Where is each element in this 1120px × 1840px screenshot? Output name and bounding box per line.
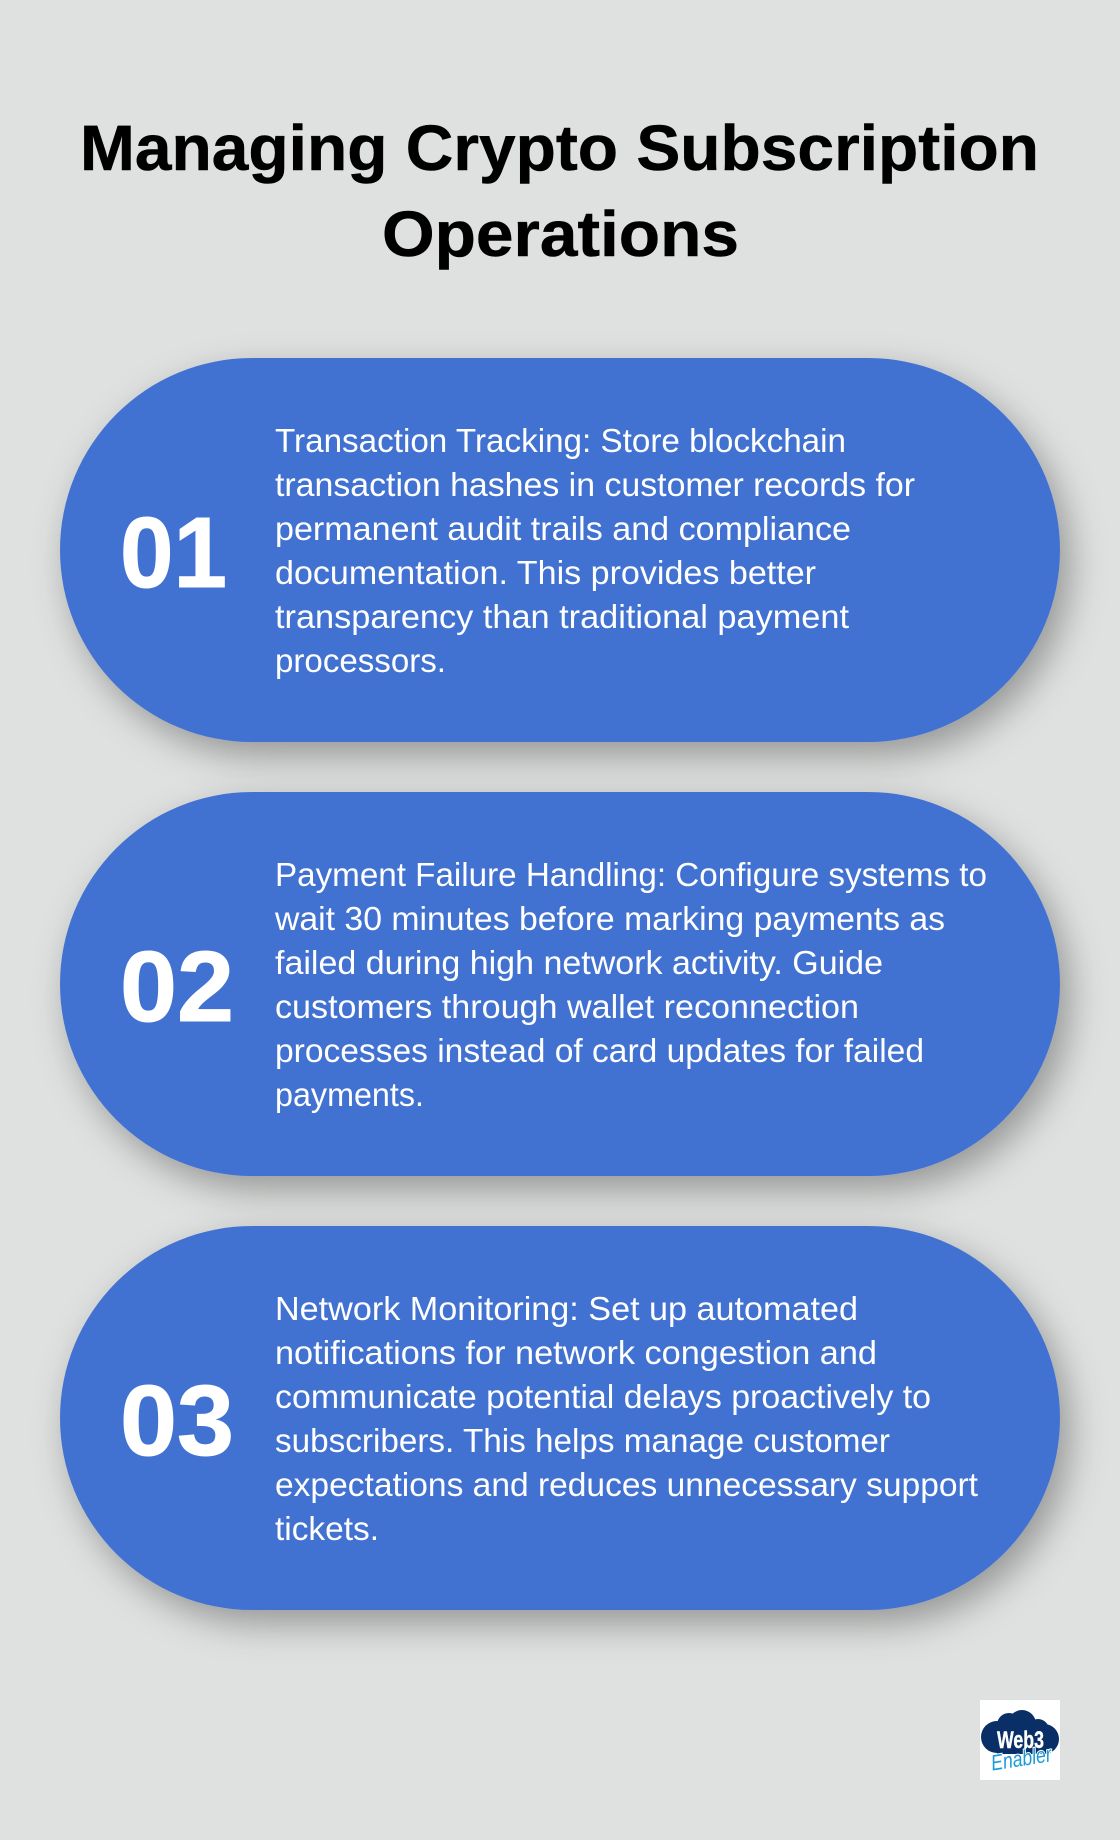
panel: step 02 payment failure handling: [60, 792, 1060, 1176]
text block 02: failed during high network activity. Guide: [275, 944, 883, 981]
pill background 02: [60, 792, 1060, 1176]
number 01: 01: [120, 497, 227, 609]
text block 01: Transaction Tracking: Store blockchain: [275, 422, 846, 459]
panel: step 03 network monitoring: [60, 1226, 1060, 1610]
text block 02: [274, 856, 987, 1113]
text block 02: payments.: [275, 1076, 424, 1113]
title: [80, 112, 1039, 270]
pill background 01: [60, 358, 1060, 742]
text block 03: [275, 1290, 978, 1547]
text block 03: tickets.: [275, 1510, 379, 1547]
text block 02: customers through wallet reconnection: [275, 988, 859, 1025]
text block 02: wait 30 minutes before marking payments as: [274, 900, 945, 937]
text block 01: [275, 422, 915, 679]
pill background 03: [60, 1226, 1060, 1610]
text block 03: communicate potential delays proactively to: [275, 1378, 931, 1415]
icon: Web3 Enabler logo: Enabler: [989, 1741, 1055, 1776]
text block 01: documentation. This provides better: [275, 554, 816, 591]
text block 03: subscribers. This helps manage customer: [275, 1422, 890, 1459]
title: Operations: [382, 198, 739, 270]
number 02: 02: [120, 931, 234, 1043]
number 03: 03: [120, 1365, 234, 1477]
text block 01: transparency than traditional payment: [275, 598, 849, 635]
panel: step 01 transaction tracking: [60, 358, 1060, 742]
text block 02: processes instead of card updates for failed: [275, 1032, 924, 1069]
text block 03: notifications for network congestion and: [275, 1334, 877, 1371]
title: Managing Crypto Subscription: [80, 112, 1039, 184]
text block 03: Network Monitoring: Set up automated: [275, 1290, 858, 1327]
icon: Web3 Enabler logo: [980, 1700, 1060, 1780]
text block 01: processors.: [275, 642, 446, 679]
text block 01: transaction hashes in customer records for: [275, 466, 915, 503]
text block 02: Payment Failure Handling: Configure systems to: [275, 856, 987, 893]
text block 03: expectations and reduces unnecessary support: [275, 1466, 978, 1503]
text block 01: permanent audit trails and compliance: [275, 510, 851, 547]
icon: Web3 Enabler logo: Web3: [997, 1727, 1044, 1754]
